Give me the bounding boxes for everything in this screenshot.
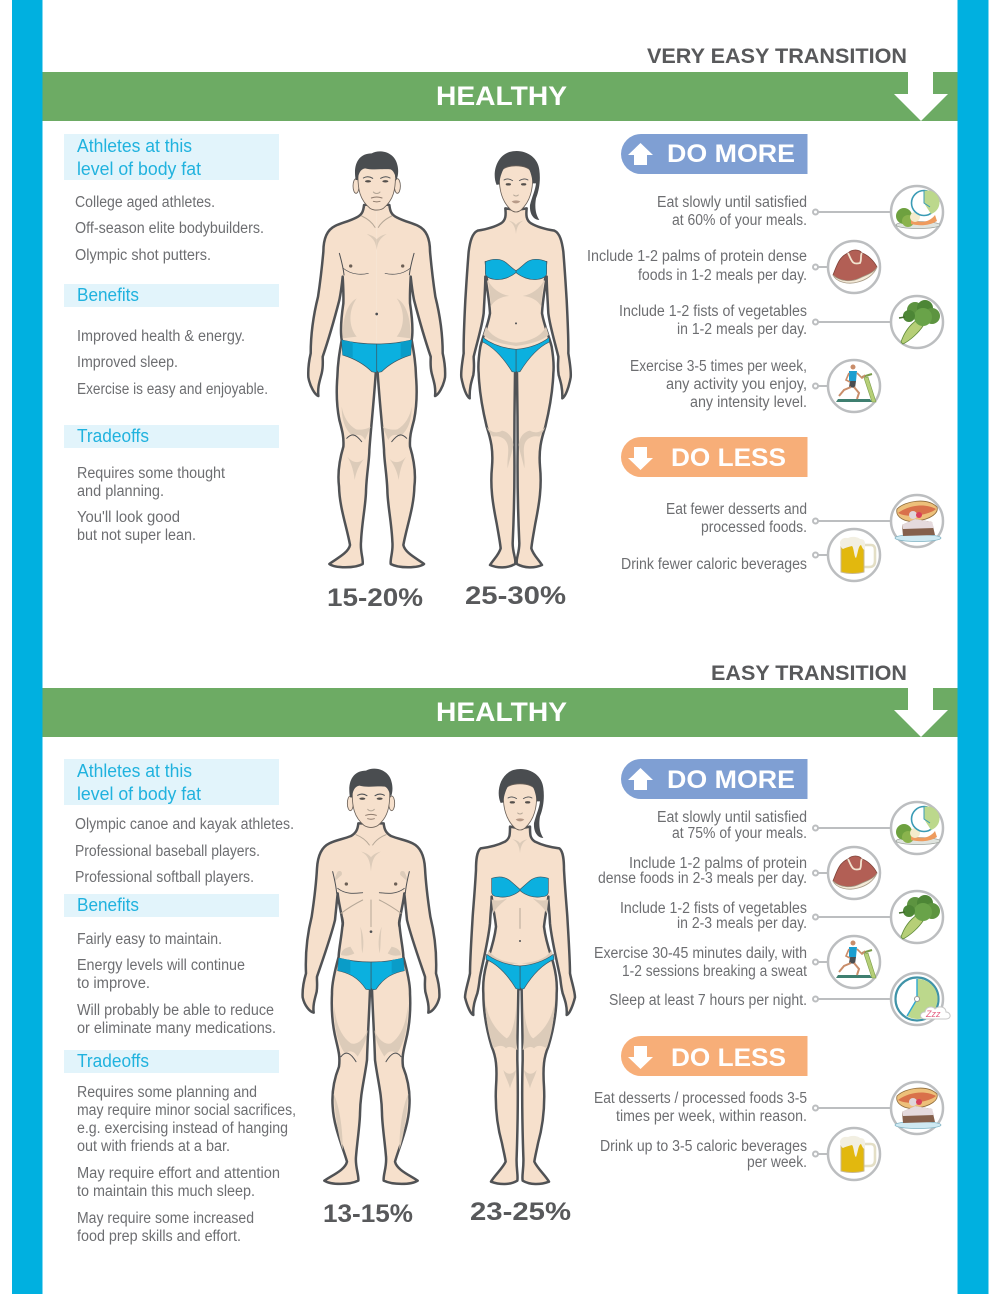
panel: athletes: Olympic canoe and kayak athletes. bbox=[75, 816, 294, 833]
panel: tradeoffs: Tradeoffs bbox=[77, 426, 149, 446]
tip: protein: dense foods in 2-3 meals per day. bbox=[598, 870, 807, 887]
panel: tradeoffs: e.g. exercising instead of hanging bbox=[77, 1120, 288, 1137]
male percentage: 13-15% bbox=[323, 1200, 413, 1228]
figure: male 13-15% bbox=[303, 769, 439, 1184]
tip: protein: Include 1-2 palms of protein dense bbox=[587, 248, 807, 265]
panel: tradeoffs bbox=[64, 425, 279, 544]
male percentage: 15-20% bbox=[327, 584, 423, 612]
tip: vegetables: Include 1-2 fists of vegetables bbox=[620, 900, 807, 917]
panel: athletes: Professional baseball players. bbox=[75, 843, 260, 860]
tip: exercise: any activity you enjoy, bbox=[666, 376, 807, 393]
panel: athletes bbox=[64, 134, 279, 264]
transition label: EASY TRANSITION bbox=[711, 662, 907, 685]
tip: sleep bbox=[609, 973, 950, 1025]
tip: vegetables bbox=[620, 891, 943, 943]
section: easy transition bbox=[42, 662, 958, 1245]
panel: tradeoffs: but not super lean. bbox=[77, 527, 196, 544]
panel: tradeoffs: Tradeoffs bbox=[77, 1051, 149, 1071]
panel: athletes bbox=[64, 759, 294, 886]
panel: benefits: Will probably be able to reduce bbox=[77, 1002, 274, 1019]
panel: benefits: to improve. bbox=[77, 975, 150, 992]
female percentage: 23-25% bbox=[470, 1198, 571, 1226]
panel: athletes: Off-season elite bodybuilders. bbox=[75, 220, 264, 237]
tip: eat slowly: Eat slowly until satisfied bbox=[657, 809, 807, 826]
panel: benefits: Improved sleep. bbox=[77, 354, 178, 371]
panel: tradeoffs: may require minor social sacrifices, bbox=[77, 1102, 296, 1119]
panel: benefits: Exercise is easy and enjoyable. bbox=[77, 381, 268, 398]
do less pill: DO LESS bbox=[671, 1044, 786, 1072]
panel: athletes: College aged athletes. bbox=[75, 194, 215, 211]
panel: benefits bbox=[64, 894, 279, 1037]
female percentage: 25-30% bbox=[465, 582, 566, 610]
tip: eat slowly: at 60% of your meals. bbox=[672, 212, 807, 229]
panel: tradeoffs: You'll look good bbox=[77, 509, 180, 526]
panel: tradeoffs: Requires some planning and bbox=[77, 1084, 257, 1101]
panel: benefits: Benefits bbox=[77, 895, 139, 915]
transition label: VERY EASY TRANSITION bbox=[647, 45, 907, 68]
panel: benefits bbox=[64, 284, 279, 398]
panel: tradeoffs: food prep skills and effort. bbox=[77, 1228, 241, 1245]
green banner with arrow bbox=[42, 72, 958, 121]
panel: tradeoffs: out with friends at a bar. bbox=[77, 1138, 230, 1155]
panel: benefits: Fairly easy to maintain. bbox=[77, 931, 222, 948]
tip: exercise bbox=[594, 936, 880, 988]
tip: eat slowly bbox=[657, 186, 943, 238]
panel: benefits: Benefits bbox=[77, 285, 139, 305]
tip: exercise: Exercise 3-5 times per week, bbox=[630, 358, 807, 375]
panel: tradeoffs: to maintain this much sleep. bbox=[77, 1183, 255, 1200]
panel: benefits: Energy levels will continue bbox=[77, 957, 245, 974]
tip: vegetables bbox=[619, 296, 943, 348]
tip: beverages: Drink fewer caloric beverages bbox=[621, 556, 807, 573]
tip: desserts bbox=[666, 495, 943, 547]
tip: desserts: Eat desserts / processed foods 3-5 bbox=[594, 1090, 807, 1107]
do more pill: DO MORE bbox=[667, 140, 795, 168]
figure: female 23-25% bbox=[465, 769, 575, 1184]
do less pill bbox=[621, 1036, 808, 1076]
do less pill bbox=[621, 437, 808, 477]
tip: beverages: Drink up to 3-5 caloric beverages bbox=[600, 1138, 807, 1155]
panel: athletes: level of body fat bbox=[77, 784, 201, 804]
green banner with arrow: HEALTHY bbox=[436, 697, 567, 727]
tip: sleep: Sleep at least 7 hours per night. bbox=[609, 992, 807, 1009]
panel: athletes: Athletes at this bbox=[77, 136, 192, 156]
panel: tradeoffs: Requires some thought bbox=[77, 465, 226, 482]
tip: eat slowly: at 75% of your meals. bbox=[672, 825, 807, 842]
tip: exercise: 1-2 sessions breaking a sweat bbox=[622, 963, 808, 980]
panel: athletes: Athletes at this bbox=[77, 761, 192, 781]
panel: athletes: Professional softball players. bbox=[75, 869, 254, 886]
figure: male 15-20% bbox=[308, 151, 445, 567]
tip: protein: foods in 1-2 meals per day. bbox=[638, 267, 807, 284]
tip: exercise: Exercise 30-45 minutes daily, with bbox=[594, 945, 807, 962]
right blue border bbox=[958, 0, 988, 1294]
tip: desserts bbox=[594, 1082, 943, 1134]
do less pill: DO LESS bbox=[671, 444, 786, 472]
tip: desserts: times per week, within reason. bbox=[616, 1108, 807, 1125]
panel: athletes: Olympic shot putters. bbox=[75, 247, 211, 264]
tip: beverages bbox=[600, 1128, 880, 1180]
tip: vegetables: Include 1-2 fists of vegetables bbox=[619, 303, 807, 320]
tip: beverages: per week. bbox=[747, 1154, 807, 1171]
tip: exercise: any intensity level. bbox=[690, 394, 807, 411]
panel: benefits: Improved health & energy. bbox=[77, 328, 245, 345]
tip: protein bbox=[587, 241, 880, 293]
section: very easy transition bbox=[42, 45, 958, 612]
tip: exercise bbox=[630, 358, 880, 412]
green banner with arrow bbox=[42, 688, 958, 737]
panel: benefits: or eliminate many medications. bbox=[77, 1020, 276, 1037]
figure: female 25-30% bbox=[461, 151, 571, 567]
tip: desserts: processed foods. bbox=[701, 519, 807, 536]
tip: vegetables: in 1-2 meals per day. bbox=[677, 321, 807, 338]
panel: tradeoffs bbox=[64, 1050, 296, 1245]
green banner with arrow: HEALTHY bbox=[436, 81, 567, 111]
panel: tradeoffs: May require effort and attention bbox=[77, 1165, 280, 1182]
do more pill bbox=[621, 759, 808, 799]
tip: eat slowly: Eat slowly until satisfied bbox=[657, 194, 807, 211]
tip: protein bbox=[598, 847, 880, 899]
panel: tradeoffs: May require some increased bbox=[77, 1210, 254, 1227]
do more pill: DO MORE bbox=[667, 766, 795, 794]
tip: desserts: Eat fewer desserts and bbox=[666, 501, 807, 518]
tip: beverages bbox=[621, 529, 880, 581]
tip: eat slowly bbox=[657, 802, 943, 854]
tip: vegetables: in 2-3 meals per day. bbox=[677, 915, 807, 932]
panel: tradeoffs: and planning. bbox=[77, 483, 164, 500]
panel: athletes: level of body fat bbox=[77, 159, 201, 179]
do more pill bbox=[621, 134, 808, 174]
left blue border bbox=[12, 0, 42, 1294]
tip: protein: Include 1-2 palms of protein bbox=[629, 855, 807, 872]
